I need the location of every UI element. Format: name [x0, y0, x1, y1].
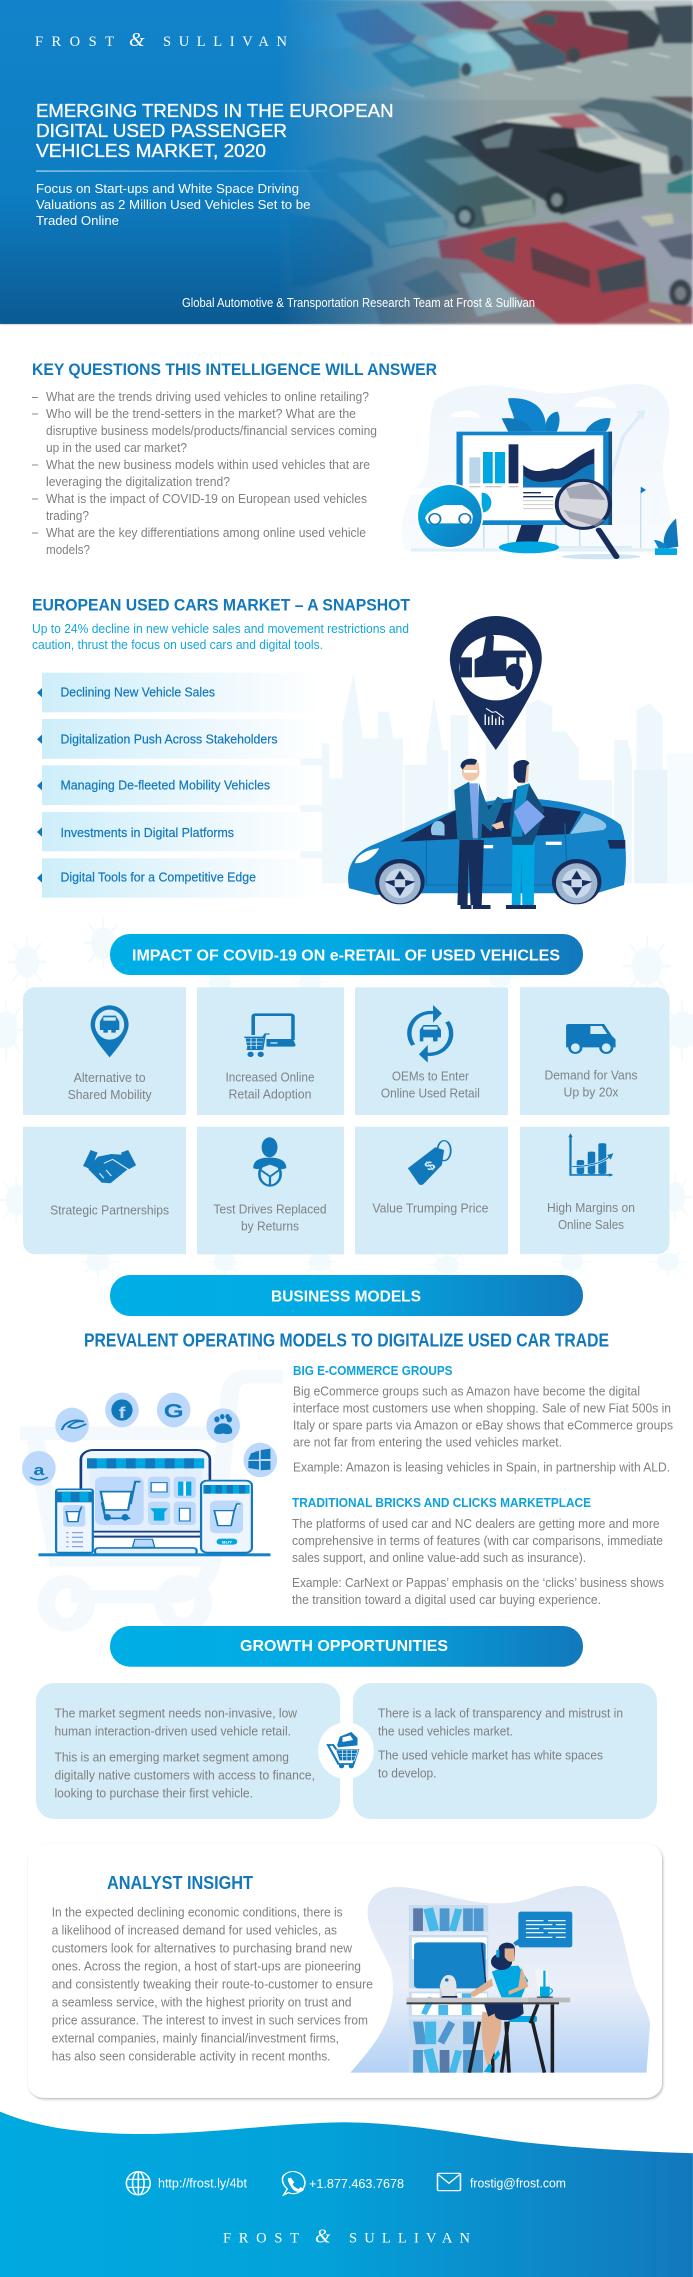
insight text: ones. Across the region, a host of start-ups are pioneering [52, 1959, 361, 1973]
desk and chair [407, 1969, 570, 2073]
tablet: BUY [222, 1540, 232, 1544]
card: value trumping price: $ [422, 1159, 440, 1174]
icon: car in shopping cart [318, 1722, 374, 1779]
logo [35, 29, 288, 51]
car [348, 798, 626, 895]
section: key questions [32, 361, 678, 559]
card: high margins on online sales: Online Sales [558, 1218, 624, 1232]
insight text: external companies, mainly financial/investment firms, [52, 2031, 339, 2045]
brand bubbles [22, 1393, 277, 1486]
blue gradient overlay [0, 0, 475, 324]
card: left opportunity: looking to purchase their first vehicle. [54, 1787, 253, 1801]
leaves [508, 398, 546, 432]
brand bubbles: a [33, 1461, 45, 1478]
pill heading: business models: BUSINESS MODELS [271, 1289, 421, 1306]
snapshot summary: caution, thrust the focus on used cars and digital tools. [32, 638, 323, 652]
card: demand for vans: Demand for Vans [544, 1069, 638, 1083]
section: market snapshot [32, 596, 693, 909]
subtitle: Focus on Start-ups and White Space Driving [36, 181, 299, 196]
text block: traditional bricks and clicks marketplace: comprehensive in terms of features (with car comparisons, immediate [292, 1534, 663, 1548]
magnifier [599, 530, 616, 557]
plant [664, 518, 678, 548]
illustration: monitor, charts and magnifier [402, 384, 678, 559]
footer logo: & [315, 2226, 331, 2248]
text block: traditional bricks and clicks marketplace: The platforms of used car and NC dealers are getting more and more [292, 1517, 660, 1531]
title [36, 100, 394, 161]
feature bars [37, 673, 322, 898]
title: DIGITAL USED PASSENGER [36, 120, 287, 141]
bar: digitalization push [37, 719, 322, 759]
card: left opportunity: digitally native customers with access to finance, [54, 1769, 315, 1783]
insight text: a likelihood of increased demand for used vehicles, as [52, 1923, 337, 1937]
text block: traditional bricks and clicks marketplace [292, 1495, 664, 1607]
bar: de-fleeted vehicles: Managing De-fleeted Mobility Vehicles [60, 778, 270, 793]
question list: models? [46, 543, 90, 557]
text block: big e-commerce groups: interface most customers use when shopping. Sale of new Fiat 500s in [293, 1402, 671, 1416]
title: EMERGING TRENDS IN THE EUROPEAN [36, 100, 394, 121]
heading: snapshot: EUROPEAN USED CARS MARKET – A SNAPSHOT [32, 596, 410, 614]
research team credit: Global Automotive & Transportation Research Team at Frost & Sullivan [182, 295, 535, 310]
card: value trumping price [355, 1127, 508, 1254]
illustration: e-commerce devices [20, 1377, 283, 1625]
card: right opportunity: There is a lack of transparency and mistrust in [378, 1707, 623, 1721]
text block: big e-commerce groups: Italy or spare parts via Amazon or eBay shows that eCommerce groups [293, 1419, 673, 1433]
footer logo: SULLIVAN [349, 2231, 471, 2247]
card: oems to enter online used retail: OEMs to Enter [392, 1069, 469, 1083]
computer monitor [414, 1942, 486, 1998]
card: left opportunity: human interaction-driven used vehicle retail. [54, 1725, 291, 1739]
snapshot summary [32, 622, 409, 652]
insight text: has also seen considerable activity in recent months. [52, 2049, 330, 2063]
insight text: a seamless service, with the highest priority on trust and [52, 1995, 352, 2009]
card: right opportunity: The used vehicle market has white spaces [378, 1749, 603, 1763]
card: demand for vans: Up by 20x [564, 1086, 619, 1100]
footer background wave [0, 2112, 693, 2277]
section: business models [20, 1275, 673, 1625]
bar: declining new vehicle sales: Declining New Vehicle Sales [60, 685, 215, 700]
hero banner [0, 0, 693, 324]
title: VEHICLES MARKET, 2020 [36, 140, 266, 161]
man right [491, 760, 545, 909]
text block: traditional bricks and clicks marketplace: sales support, and online value-add such as insurance). [292, 1551, 586, 1565]
hero photo: parking lot with cars [0, 0, 693, 324]
watermark cart [20, 1377, 283, 1625]
bar: digital platforms [37, 812, 322, 851]
text block: big e-commerce groups: BIG E-COMMERCE GROUPS [293, 1363, 453, 1378]
brand bubbles: f [119, 1404, 126, 1421]
card: increased online retail adoption: Retail Adoption [228, 1087, 312, 1101]
car badge [416, 483, 483, 549]
heading: prevalent operating models: PREVALENT OPERATING MODELS TO DIGITALIZE USED CAR TRADE [84, 1331, 609, 1351]
question list: What are the trends driving used vehicles to online retailing? [46, 390, 369, 404]
question list: What is the impact of COVID-19 on European used vehicles [46, 492, 367, 506]
card: left opportunity [36, 1683, 340, 1819]
phone [56, 1489, 93, 1553]
chat bubble [508, 1912, 572, 1947]
footer contacts [126, 2172, 566, 2195]
pill heading: growth opportunities [110, 1626, 583, 1667]
logo: SULLIVAN [163, 34, 288, 50]
subtitle: Traded Online [36, 213, 119, 228]
insight text: and consistently tweaking their route-to-customer to ensure [52, 1977, 373, 1991]
text block: traditional bricks and clicks marketplace: Example: CarNext or Pappas’ emphasis on the ‘clicks’ business shows [292, 1576, 664, 1590]
insight text [52, 1905, 373, 2063]
card: left opportunity: This is an emerging market segment among [54, 1751, 289, 1765]
section: analyst insight [28, 1844, 662, 2098]
card: demand for vans [520, 987, 670, 1115]
card: high margins on online sales: High Margins on [547, 1201, 635, 1215]
card: right opportunity [353, 1683, 657, 1819]
pill heading: business models [110, 1275, 583, 1316]
illustration: analyst at desk [350, 1886, 650, 2073]
background virus pattern [0, 918, 693, 1279]
bar: declining new vehicle sales [37, 673, 322, 712]
text block: traditional bricks and clicks marketplace: the transition toward a digital used car buying experience. [292, 1593, 601, 1607]
bar: digital tools [37, 858, 322, 898]
logo: FROST [35, 34, 114, 50]
stand [515, 525, 544, 543]
woman [470, 1941, 553, 2073]
card: test drives replaced by returns: Test Drives Replaced [214, 1202, 327, 1216]
pill heading: growth opportunities: GROWTH OPPORTUNITIES [240, 1638, 448, 1655]
front wheel [375, 859, 425, 904]
card: strategic partnerships [23, 1127, 186, 1254]
question list: up in the used car market? [46, 441, 187, 455]
pill heading: impact of covid-19 [110, 934, 583, 975]
card: increased online retail adoption [197, 987, 344, 1115]
question list: disruptive business models/products/financial services coming [46, 424, 377, 438]
heading: analyst insight: ANALYST INSIGHT [107, 1873, 253, 1893]
monitor [456, 432, 612, 525]
bookshelf [409, 1905, 488, 2073]
card: test drives replaced by returns: by Returns [241, 1219, 299, 1233]
heading: key questions: KEY QUESTIONS THIS INTELLIGENCE WILL ANSWER [32, 361, 437, 379]
question list: Who will be the trend-setters in the market? What are the [46, 407, 356, 421]
bar: digital platforms: Investments in Digital Platforms [60, 825, 234, 840]
insight text: In the expected declining economic conditions, there is [52, 1905, 343, 1919]
card: left opportunity: The market segment needs non-invasive, low [54, 1707, 298, 1721]
card: oems to enter online used retail: Online Used Retail [381, 1086, 480, 1100]
rear wheel [552, 859, 601, 904]
man left [454, 759, 504, 909]
question list: leveraging the digitalization trend? [46, 475, 230, 489]
icon: globe [126, 2172, 150, 2195]
bar: digitalization push: Digitalization Push Across Stakeholders [60, 731, 278, 746]
section: covid impact [23, 934, 670, 1254]
brand bubbles: G [164, 1399, 184, 1422]
question list: What the new business models within used vehicles that are [46, 458, 370, 472]
icon: envelope [437, 2173, 460, 2191]
card: test drives replaced by returns [197, 1127, 344, 1254]
monitor [81, 1450, 210, 1555]
text block: big e-commerce groups: are not far from entering the used vehicles market. [293, 1436, 562, 1450]
email: frostig@frost.com [470, 2175, 566, 2190]
skyline backdrop [300, 673, 693, 883]
subtitle: Valuations as 2 Million Used Vehicles Set to be [36, 197, 310, 212]
text block: traditional bricks and clicks marketplace: TRADITIONAL BRICKS AND CLICKS MARKETPLACE [292, 1495, 591, 1510]
card: high margins on online sales [520, 1127, 670, 1254]
card: right opportunity: the used vehicles market. [378, 1725, 513, 1739]
icon: whatsapp phone [282, 2172, 305, 2195]
question list: What are the key differentiations among online used vehicle [46, 526, 366, 540]
pill heading: impact of covid-19: IMPACT OF COVID-19 ON e-RETAIL OF USED VEHICLES [132, 948, 560, 965]
text block: big e-commerce groups: Big eCommerce groups such as Amazon have become the digital [293, 1385, 640, 1399]
phone number: +1.877.463.7678 [309, 2176, 404, 2191]
card: alternative to shared mobility: Shared Mobility [68, 1088, 152, 1102]
card: right opportunity: to develop. [378, 1767, 436, 1781]
bar: digital tools: Digital Tools for a Competitive Edge [60, 870, 256, 885]
insight text: price assurance. The interest to invest in such services from [52, 2013, 368, 2027]
insight text: customers look for alternatives to purchasing brand new [52, 1941, 353, 1955]
card: increased online retail adoption: Increased Online [226, 1070, 315, 1084]
question list [32, 390, 377, 557]
text block: big e-commerce groups: Example: Amazon is leasing vehicles in Spain, in partnership with ALD. [293, 1461, 670, 1475]
text block: big e-commerce groups [293, 1363, 673, 1475]
footer logo [223, 2226, 471, 2248]
website: http://frost.ly/4bt [158, 2175, 247, 2190]
question list: trading? [46, 509, 89, 523]
footer logo: FROST [223, 2231, 299, 2247]
subtitle [36, 181, 310, 228]
bar: de-fleeted vehicles [37, 765, 322, 805]
card: value trumping price: Value Trumping Price [372, 1202, 488, 1216]
illustration: location pin with hand and keys [450, 616, 542, 750]
card: alternative to shared mobility: Alternative to [74, 1071, 146, 1085]
card background [28, 1844, 662, 2098]
card: strategic partnerships: Strategic Partnerships [50, 1203, 169, 1217]
logo: & [129, 29, 145, 51]
illustration: car and two men shaking hands [348, 759, 626, 909]
tablet [201, 1481, 252, 1553]
card: alternative to shared mobility [23, 987, 186, 1115]
card: oems to enter online used retail [355, 987, 508, 1115]
section: growth opportunities [36, 1626, 657, 1819]
snapshot summary: Up to 24% decline in new vehicle sales and movement restrictions and [32, 622, 409, 636]
